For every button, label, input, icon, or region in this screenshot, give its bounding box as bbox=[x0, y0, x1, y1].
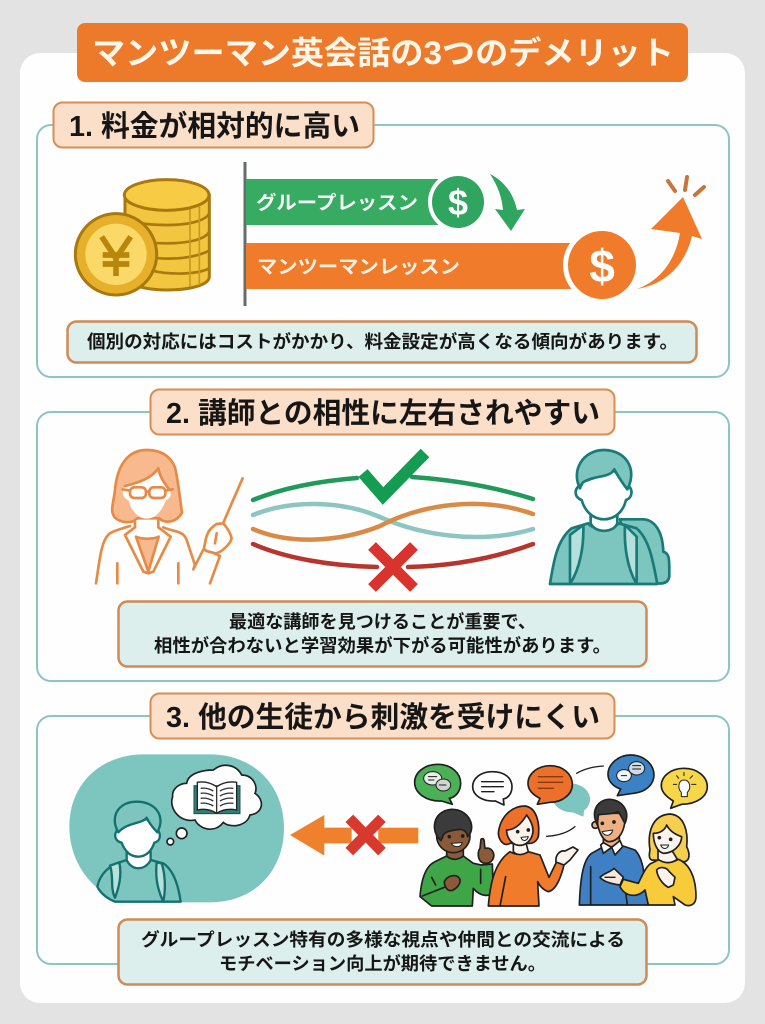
illustration: speech bubbles bbox=[415, 755, 707, 836]
speech bubble: yellow with lightbulb bbox=[661, 768, 707, 808]
illustration: lone student thinking bbox=[69, 754, 284, 902]
heading: section 2 bbox=[150, 390, 614, 434]
arrow: price up bbox=[637, 177, 704, 289]
callout: section 2 text bbox=[118, 602, 646, 666]
icon: thought bubble with book bbox=[167, 765, 261, 845]
bar: group lesson: $ bbox=[448, 182, 468, 223]
title: マンツーマン英会話の3つのデメリット bbox=[92, 35, 674, 71]
axis line bbox=[244, 162, 246, 306]
callout: section 1 text: 個別の対応にはコストがかかり、料金設定が高くなる傾向があります。 bbox=[87, 331, 678, 352]
bar: group lesson bbox=[246, 172, 488, 232]
heading: section 1 bbox=[54, 102, 374, 148]
icon: open hand bbox=[556, 847, 578, 865]
bar: one-on-one lesson bbox=[246, 227, 639, 303]
speech bubble: white bbox=[473, 772, 512, 805]
heading: section 1: 1. 料金が相対的に高い bbox=[69, 109, 360, 143]
icon: yen coin stack bbox=[75, 180, 209, 295]
illustration: two students right bbox=[579, 799, 696, 906]
heading: section 3: 3. 他の生徒から刺激を受けにくい bbox=[166, 701, 600, 734]
arrow: price down bbox=[490, 174, 525, 231]
heading: section 3 bbox=[150, 694, 614, 738]
callout: section 2 text: 最適な講師を見つけることが重要で、 bbox=[229, 611, 536, 632]
callout: section 3 text bbox=[118, 920, 646, 984]
icon: check mark bbox=[363, 453, 425, 496]
arrow: blocked exchange bbox=[290, 815, 418, 856]
callout: section 3 text: モチベーション向上が期待できません。 bbox=[219, 953, 546, 974]
heading: section 2: 2. 講師との相性に左右されやすい bbox=[166, 397, 600, 430]
connector swooshes bbox=[547, 766, 603, 836]
compatibility wave lines bbox=[253, 477, 533, 567]
panel: section 1 high cost bbox=[37, 102, 729, 377]
speech bubble: orange bbox=[528, 766, 572, 804]
title bbox=[77, 23, 688, 82]
icon: teacher bbox=[96, 450, 243, 583]
icon: student with backpack bbox=[550, 450, 669, 584]
icon: cross mark bbox=[372, 546, 414, 588]
callout: section 1 text bbox=[68, 322, 696, 362]
bar: one-on-one lesson: $ bbox=[589, 240, 615, 292]
person: blue sweater bbox=[579, 799, 648, 905]
bar: group lesson: グループレッスン bbox=[256, 191, 418, 214]
panel: section 2 teacher compatibility bbox=[37, 390, 729, 681]
bar: one-on-one lesson: マンツーマンレッスン bbox=[257, 257, 460, 278]
person: orange sweater bbox=[488, 806, 564, 906]
speech bubble: teal bbox=[554, 784, 589, 816]
callout: section 2 text: 相性が合わないと学習効果が下がる可能性があります。 bbox=[154, 635, 611, 656]
illustration: two students left bbox=[420, 806, 564, 906]
person: yellow sweater bbox=[620, 814, 696, 906]
speech bubble: green bbox=[415, 764, 461, 804]
panel: section 3 no peer stimulation bbox=[37, 694, 729, 984]
speech bubble: blue bbox=[608, 755, 654, 796]
person: green sweater bbox=[420, 809, 494, 906]
callout: section 3 text: グループレッスン特有の多様な視点や仲間との交流による bbox=[141, 929, 625, 950]
